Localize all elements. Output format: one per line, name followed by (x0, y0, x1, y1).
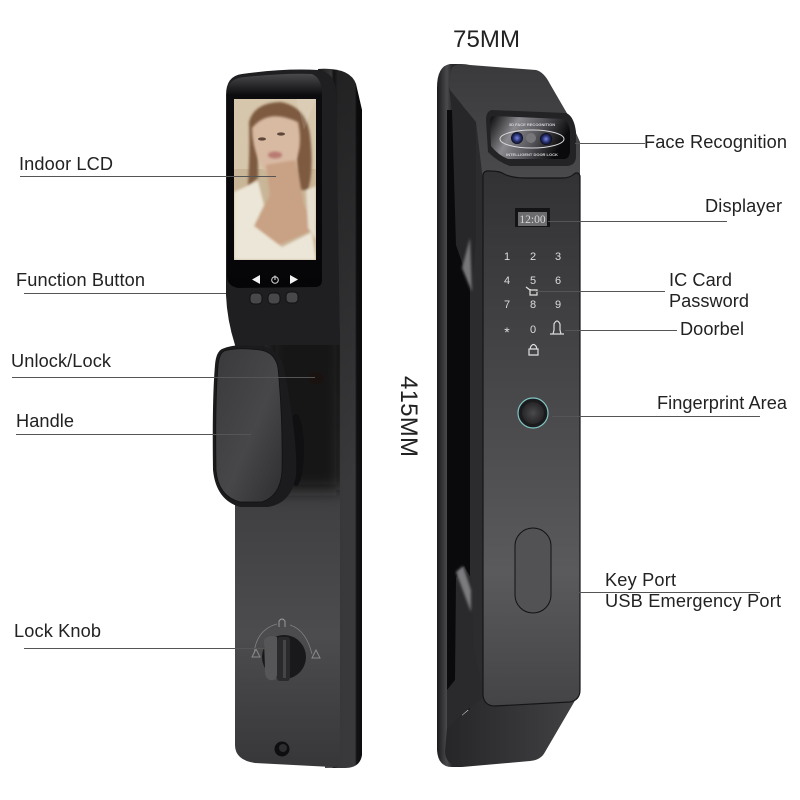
keypad: 5 (530, 275, 536, 287)
fingerprint sensor (518, 398, 548, 428)
base wedge (445, 692, 580, 767)
camera housing (486, 110, 576, 166)
callout: Handle: Handle (16, 411, 74, 431)
lock icon (529, 344, 538, 355)
dimension: width: 75MM (453, 26, 520, 53)
callout: IC Card Password: IC Card (669, 270, 732, 290)
indoor LCD portrait photo (234, 99, 316, 260)
rail upper shade (318, 69, 362, 768)
keypad: 9 (555, 299, 561, 311)
function buttons (250, 292, 298, 304)
callout: Lock Knob: Lock Knob (14, 621, 101, 641)
keypad: 4 (504, 275, 510, 287)
lower side rib (447, 566, 484, 728)
screen glass (227, 74, 322, 288)
side band (470, 110, 484, 710)
rear rail (318, 69, 362, 768)
screw hole (274, 742, 290, 756)
callout: Doorbel: Doorbel (680, 319, 744, 339)
callout: Key Port USB Emergency Port (552, 570, 781, 611)
dark recess behind handle (270, 325, 342, 490)
keypad: 7 (504, 299, 510, 311)
rear rail (437, 64, 462, 767)
callout: Face Recognition: Face Recognition (644, 132, 787, 152)
callout: Fingerprint Area: Fingerprint Area (657, 393, 788, 413)
keypad: 3 (555, 251, 561, 263)
lower plate (235, 330, 340, 767)
back icon (526, 287, 537, 295)
keypad: 2 (530, 251, 536, 263)
key port cover (515, 528, 551, 613)
keypad: 6 (555, 275, 561, 287)
lock knob (252, 619, 320, 681)
callout: Displayer: Displayer (705, 196, 782, 216)
left lock: indoor panel (213, 69, 362, 768)
screen arrow and power icons (252, 275, 298, 284)
keypad: 8 (530, 299, 536, 311)
dimension: height: 415MM (395, 376, 422, 457)
upper side rib (449, 88, 476, 292)
upper screen housing (226, 70, 340, 345)
bell icon (550, 321, 564, 334)
callout: Unlock/Lock: Unlock/Lock (11, 351, 112, 371)
dark side recess (447, 110, 472, 710)
lower rib highlight (456, 566, 471, 612)
callout: IC Card Password (535, 270, 749, 311)
callout: Indoor LCD: Indoor LCD (19, 154, 113, 174)
upper rib highlight (462, 238, 472, 292)
keypad: 1 (504, 251, 510, 263)
camera glass (490, 116, 570, 159)
keypad (504, 251, 561, 340)
handle (213, 345, 304, 507)
time display (515, 208, 550, 227)
callout: Key Port USB Emergency Port: Key Port (605, 570, 676, 590)
keypad: * (504, 324, 510, 340)
callout: Key Port USB Emergency Port: USB Emergency Port (605, 591, 781, 611)
top cap (450, 64, 580, 180)
front face panel (483, 171, 580, 706)
time display: 12:00 (519, 214, 546, 226)
callout: IC Card Password: Password (669, 291, 749, 311)
right lock: outdoor panel (437, 64, 580, 767)
unlock/lock button (308, 372, 324, 384)
keypad: 0 (530, 324, 536, 336)
callout: Function Button: Function Button (16, 270, 145, 290)
camera glass: INTELLIGENT DOOR LOCK (506, 152, 558, 157)
camera glass: 3D FACE RECOGNITION (509, 122, 555, 127)
